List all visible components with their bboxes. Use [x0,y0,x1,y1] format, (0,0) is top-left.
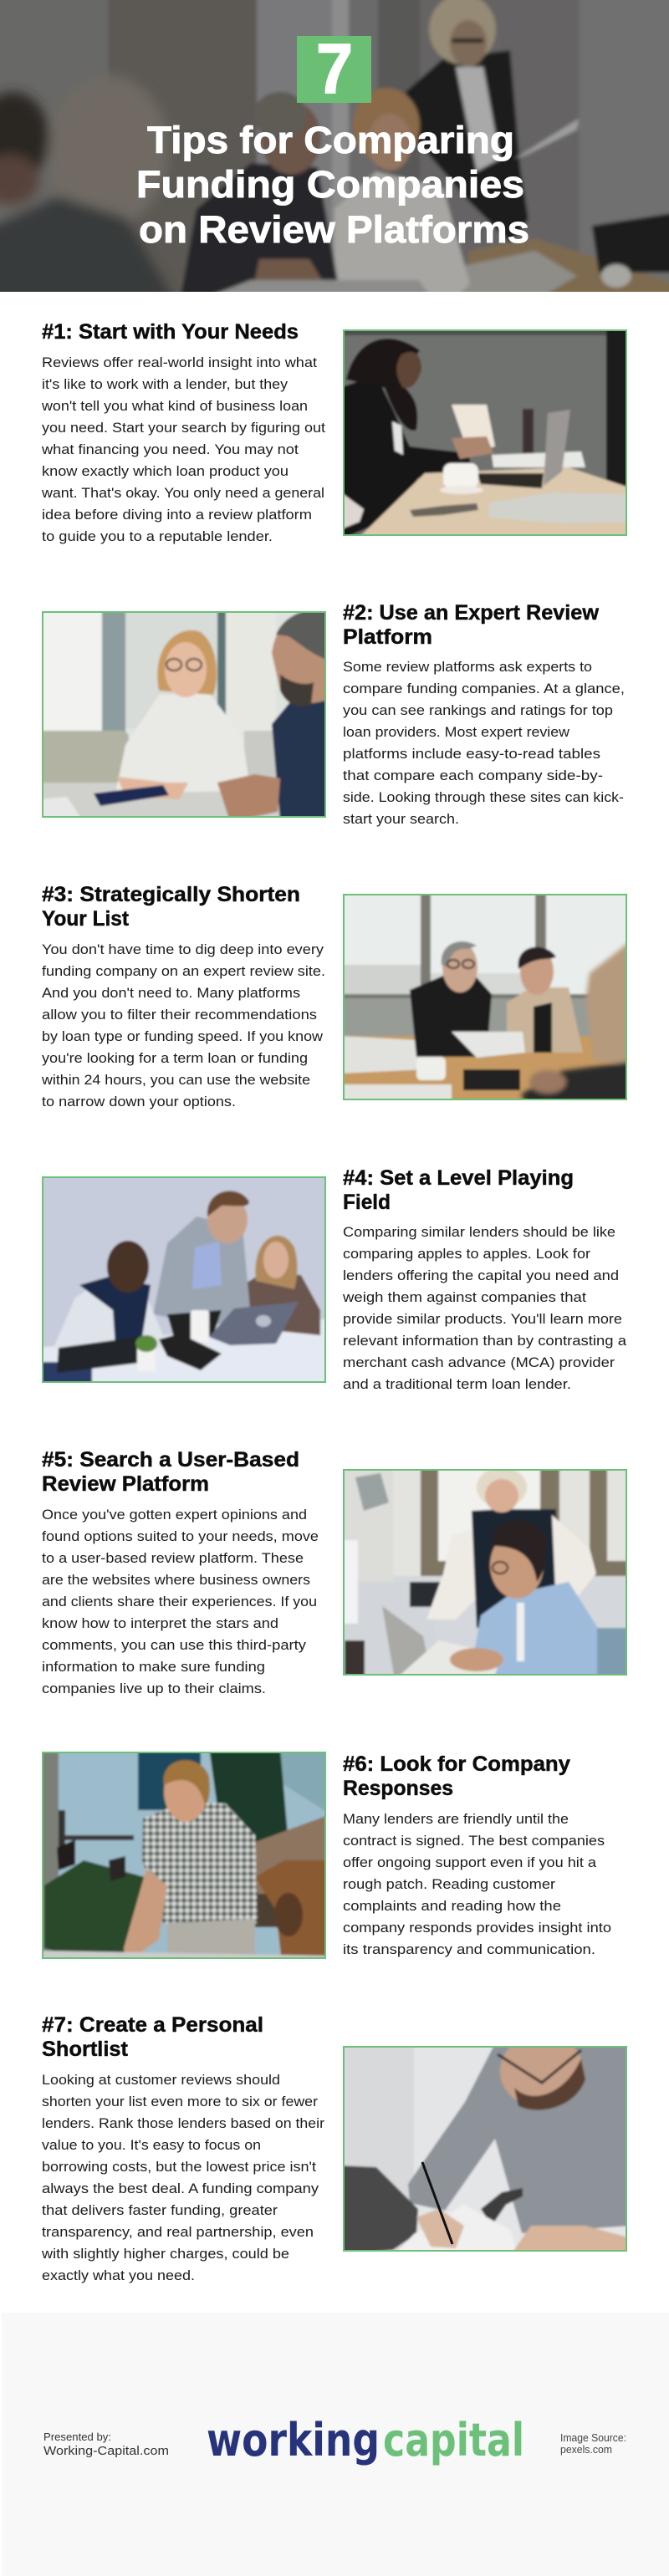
text block: tip 6 [343,1812,611,1957]
text block: tip 7: always the best deal. A funding company [42,2181,319,2196]
text block: tip 2: that compare each company side-by- [343,768,603,783]
heading: tip 4: Field [343,1191,391,1214]
text block: tip 2: start your search. [343,812,459,827]
heading: tip 5: #5: Search a User-Based [42,1448,299,1472]
text block: tip 1: what financing you need. You may not [41,442,299,457]
text block: tip 1 [41,355,325,544]
text block: tip 3: allow you to filter their recommendations [42,1007,317,1023]
text block: tip 3: to narrow down your options. [42,1094,236,1109]
heading: tip 4: #4: Set a Level Playing [343,1166,574,1190]
logo: workingcapital: working [207,2414,380,2466]
text block: tip 4: provide similar products. You'll learn more [343,1312,622,1327]
text block: tip 1: won't tell you what kind of business loan [41,399,308,414]
text block: tip 7: lenders. Rank those lenders based on their [42,2116,325,2131]
photo: man in checked shirt leaning over table [38,1747,330,1963]
photo: man writing with a pen [339,2034,631,2256]
heading: tip 7: #7: Create a Personal [42,2013,263,2037]
photo: woman working at desk with laptop [339,325,631,540]
text block: tip 3: within 24 hours, you can use the website [41,1073,310,1088]
heading: tip 2: Platform [343,625,432,649]
heading: tip 5 [42,1448,299,1496]
heading: tip 3: Your List [42,907,130,931]
image source credit: pexels.com [560,2444,612,2456]
text block: tip 7: borrowing costs, but the lowest price isn't [42,2160,316,2175]
text block: tip 6: rough patch. Reading customer [343,1877,556,1892]
title: Tips for Comparing [147,119,514,161]
green number badge: 7 [316,29,353,108]
text block: tip 2: you can see rankings and ratings for top [343,703,613,718]
text block: tip 6: company responds provides insight into [343,1921,611,1936]
text block: tip 6: Many lenders are friendly until the [343,1812,569,1827]
text block: tip 4: Comparing similar lenders should be like [343,1225,615,1240]
footer [2,2313,669,2576]
image source credit: Image Source: [560,2432,626,2444]
title: on Review Platforms [139,208,529,251]
text block: tip 4: merchant cash advance (MCA) provider [343,1355,615,1370]
text block: tip 4: and a traditional term loan lender. [343,1377,571,1392]
heading: tip 5: Review Platform [42,1472,209,1496]
text block: tip 5: are the websites where business owners [42,1573,310,1588]
heading: tip 3: #3: Strategically Shorten [42,883,300,906]
text block: tip 6: complaints and reading how the [343,1899,561,1914]
heading: tip 6: Responses [343,1777,453,1800]
text block: tip 2: loan providers. Most expert review [343,725,569,740]
photo: woman in glasses talking with man [38,607,330,822]
text block: tip 1: you need. Start your search by figuring out [42,421,325,436]
panel: tip 4 [38,1166,627,1392]
panel: tip 2 [38,601,625,827]
text block: tip 7: that delivers faster funding, greater [42,2203,278,2218]
text block: tip 6: offer ongoing support even if you hit a [343,1855,597,1870]
text block: tip 4: weigh them against companies that [342,1290,586,1305]
text block: tip 5: found options suited to your needs, move [42,1529,319,1544]
text block: tip 3 [41,942,325,1109]
photo: woman supervising man on laptop [339,1465,631,1680]
panel: tip 3 [41,883,636,1111]
image source credit [560,2432,626,2456]
photo: three colleagues around a laptop [38,1172,330,1387]
text block: tip 1: want. That's okay. You only need a general [41,486,324,501]
text block: tip 7: exactly what you need. [42,2268,195,2283]
heading: tip 3 [42,883,300,931]
text block: tip 5: information to make sure funding [42,1660,265,1675]
text block: tip 7: value to you. It's easy to focus on [42,2138,261,2153]
heading: tip 4 [343,1166,574,1214]
text block: tip 2: Some review platforms ask experts to [343,660,592,675]
text block: tip 4 [342,1225,627,1392]
text block: tip 6: its transparency and communication. [343,1942,595,1957]
hero photo: meeting with dark overlay [0,0,669,292]
heading: tip 2: #2: Use an Expert Review [343,601,600,625]
text block: tip 3: by loan type or funding speed. If you know [42,1029,323,1044]
text block: tip 1: idea before diving into a review platform [42,508,312,523]
text block: tip 7: shorten your list even more to six or fewer [42,2094,319,2109]
presented by credit: Presented by: [43,2431,111,2443]
text block: tip 2: side. Looking through these sites can kick- [343,790,624,805]
text block: tip 7: Looking at customer reviews should [42,2073,280,2088]
text block: tip 1: Reviews offer real-world insight into what [42,355,317,370]
text block: tip 3: funding company on an expert review site. [42,964,325,979]
text block: tip 5: and clients share their experiences. If you [42,1594,317,1609]
heading: tip 6 [343,1752,570,1800]
logo: workingcapital [207,2414,524,2466]
text block: tip 7 [41,2073,325,2283]
panel: tip 5 [42,1448,631,1696]
logo: workingcapital: capital [383,2414,524,2466]
title: Funding Companies [136,163,524,206]
title [136,119,529,251]
text block: tip 6: contract is signed. The best companies [343,1834,605,1849]
text block: tip 7: with slightly higher charges, could be [41,2247,289,2262]
presented by credit: Working-Capital.com [43,2444,169,2458]
photo: two executives reviewing documents [339,890,636,1111]
panel: tip 1 [41,320,631,544]
text block: tip 3: you're looking for a term loan or funding [42,1051,308,1066]
heading: tip 7 [42,2013,263,2061]
heading: tip 1: #1: Start with Your Needs [42,320,299,344]
heading: tip 6: #6: Look for Company [343,1752,570,1776]
heading: tip 7: Shortlist [42,2038,129,2061]
text block: tip 5: to a user-based review platform. These [42,1551,304,1566]
hero banner [0,0,669,309]
panel: tip 7 [41,2013,631,2283]
text block: tip 7: transparency, and real partnership, even [42,2225,314,2240]
text block: tip 1: know exactly which loan product you [42,464,289,479]
text block: tip 5: Once you've gotten expert opinions and [42,1507,307,1523]
text block: tip 1: to guide you to a reputable lender. [42,529,273,544]
text block: tip 4: relevant information than by contrasting a [343,1334,627,1349]
heading: tip 2 [343,601,600,649]
green number badge [297,29,371,108]
text block: tip 5: companies live up to their claims. [42,1681,266,1696]
text block: tip 5: know how to interpret the stars and [42,1616,278,1631]
text block: tip 4: comparing apples to apples. Look for [343,1247,591,1262]
text block: tip 1: it's like to work with a lender, but they [42,377,289,392]
text block: tip 3: And you don't need to. Many platforms [42,986,300,1001]
panel: tip 6 [38,1747,611,1963]
text block: tip 2 [343,660,625,827]
presented by credit [43,2431,169,2458]
text block: tip 2: platforms include easy-to-read tables [343,747,600,762]
text block: tip 5 [42,1507,319,1696]
text block: tip 4: lenders offering the capital you need and [343,1268,619,1283]
text block: tip 2: compare funding companies. At a glance, [343,681,625,696]
text block: tip 5: comments, you can use this third-party [42,1638,307,1653]
text block: tip 3: You don't have time to dig deep into every [42,942,324,957]
